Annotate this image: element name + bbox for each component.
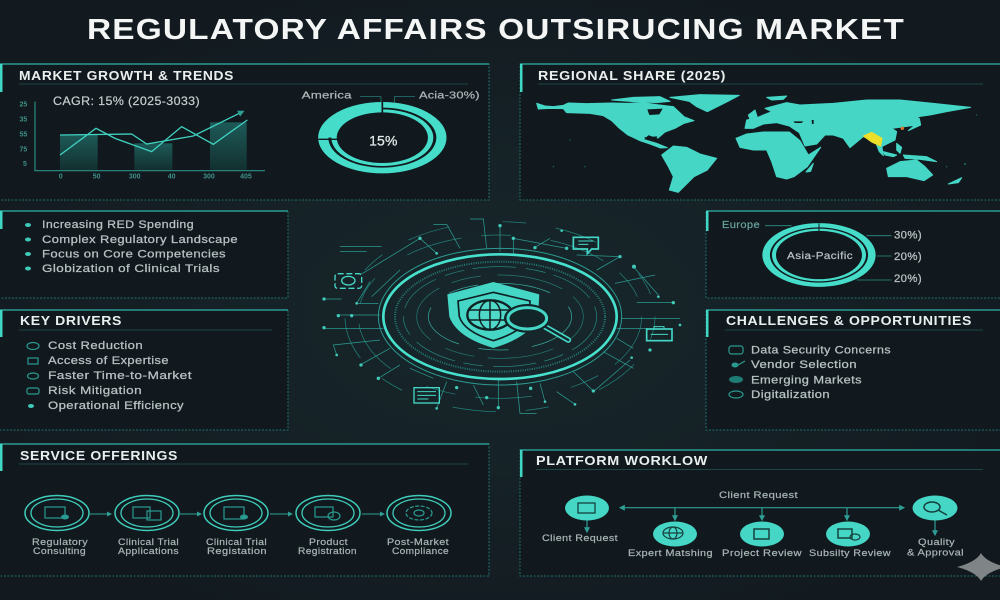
item: emerging markets: Emerging Markets	[751, 374, 862, 386]
panel: challenges and opportunities	[706, 310, 1000, 430]
step: project review: Project Review	[722, 548, 802, 559]
central illustration	[322, 219, 681, 413]
line chart with bars: 35	[19, 117, 27, 124]
service: post-market compliance: Compliance	[392, 546, 449, 557]
world map	[537, 95, 977, 192]
service: clinical trial applications: Applications	[118, 546, 179, 557]
arrows between services	[90, 513, 384, 515]
panel: key drivers	[0, 310, 288, 430]
service: clinical trial applications	[115, 496, 179, 557]
line chart with bars: 5	[23, 161, 27, 168]
icon: document	[414, 388, 439, 403]
line chart with bars: 55	[19, 132, 27, 139]
step: expert matching: Expert Matshing	[628, 548, 713, 559]
step: subsidy review: Subsilty Review	[809, 548, 891, 559]
heading: key drivers: KEY DRIVERS	[20, 313, 122, 328]
step: quality and approval: & Approval	[907, 548, 964, 558]
service: product registration: Product	[309, 537, 348, 548]
bullet: R&D spending: Increasing RED Spending	[42, 219, 194, 231]
driver: faster time to market: Faster Time-to-Market	[48, 370, 192, 382]
icon: chat card	[573, 237, 598, 254]
heading: regional share: REGIONAL SHARE (2025)	[538, 68, 726, 83]
service: product registration: Registration	[298, 546, 357, 557]
service: clinical trial registration: Clinical Trial	[206, 537, 267, 548]
line chart with bars: 40	[168, 174, 176, 181]
heading: service offerings: SERVICE OFFERINGS	[20, 448, 178, 463]
panel: market growth and trends	[0, 64, 489, 200]
donut chart: regions	[765, 223, 892, 283]
icon: shield badge	[335, 274, 362, 288]
connector dots	[322, 224, 681, 410]
step: subsidy review	[809, 522, 891, 559]
step: project review	[722, 522, 802, 559]
bullet: globalization: Globization of Clinical Trials	[42, 263, 220, 275]
step: quality and approval: Quality	[918, 537, 955, 548]
driver: risk mitigation	[27, 385, 142, 397]
driver: operational efficiency: Operational Efficiency	[48, 400, 184, 412]
item: digitalization: Digitalization	[751, 389, 830, 401]
value labels: 30%)	[894, 230, 922, 242]
value labels: 20%)	[894, 251, 922, 263]
panel: market factors list	[0, 211, 288, 298]
step: expert matching	[628, 522, 713, 559]
driver: access of expertise: Access of Expertise	[48, 355, 169, 367]
title: REGULATORY AFFAIRS OUTSIRUCING MARKET	[87, 14, 905, 46]
heading: challenges: CHALLENGES & OPPORTUNITIES	[726, 313, 972, 328]
icon: briefcase	[647, 327, 672, 341]
tech rings	[323, 219, 680, 413]
line chart with bars: 75	[19, 146, 27, 153]
service: regulatory consulting	[25, 496, 89, 557]
label: Europe: Europe	[722, 219, 760, 231]
bullet: core competencies: Focus on Core Competencies	[42, 248, 226, 260]
line chart with bars: 0	[59, 174, 63, 181]
step: client request	[542, 496, 618, 544]
heading: market growth: MARKET GROWTH & TRENDS	[19, 68, 234, 83]
panel: service offerings	[0, 444, 489, 576]
item: vendor selection: Vendor Selection	[751, 359, 857, 371]
service: post-market compliance	[387, 496, 451, 557]
bullet: regulatory landscape: Complex Regulatory Landscape	[42, 234, 238, 246]
step: client request: Client Request	[542, 533, 618, 544]
icon: sparkle watermark	[957, 553, 1000, 581]
icon: shield with globe	[447, 282, 539, 348]
heading: platform workflow: PLATFORM WORKLOW	[536, 453, 708, 468]
line chart with bars: 50	[93, 174, 101, 181]
service: post-market compliance: Post-Market	[387, 537, 449, 548]
top label: client request: Client Request	[719, 490, 798, 501]
step: quality and approval	[907, 496, 964, 558]
driver: risk mitigation: Risk Mitigation	[48, 385, 142, 397]
item: data security: Data Security Concerns	[751, 344, 891, 356]
value labels: 20%)	[894, 273, 922, 285]
service: regulatory consulting: Consulting	[33, 546, 86, 557]
panel: regional donut	[706, 211, 1000, 298]
service: clinical trial registration	[204, 496, 268, 557]
service: regulatory consulting: Regulatory	[32, 537, 88, 548]
service: clinical trial registration: Registation	[207, 546, 267, 557]
item: digitalization	[729, 389, 830, 401]
donut chart: growth	[302, 91, 480, 168]
icon: magnifying glass	[504, 304, 568, 340]
donut chart: growth: 15%	[369, 132, 398, 148]
service: clinical trial applications: Clinical Trial	[118, 537, 179, 548]
driver: cost reduction: Cost Reduction	[48, 340, 143, 352]
donut chart: growth: America	[302, 91, 352, 102]
CAGR label: CAGR: 15% (2025-3033)	[53, 94, 200, 108]
donut centre label: Asia-Pacific	[787, 251, 853, 262]
line chart with bars	[19, 102, 265, 181]
value labels	[894, 230, 922, 285]
workflow arrows	[587, 508, 935, 535]
panel: regional share	[520, 64, 1000, 200]
service: product registration	[296, 496, 360, 557]
line chart with bars: 300	[129, 174, 141, 181]
line chart with bars: 25	[19, 102, 27, 109]
glowing main ring	[383, 254, 617, 379]
line chart with bars: 405	[240, 174, 252, 181]
panel: platform workflow	[520, 450, 1000, 576]
donut chart: growth: Acia-30%)	[419, 91, 480, 102]
driver: cost reduction	[27, 340, 143, 352]
line chart with bars: 300	[203, 174, 215, 181]
